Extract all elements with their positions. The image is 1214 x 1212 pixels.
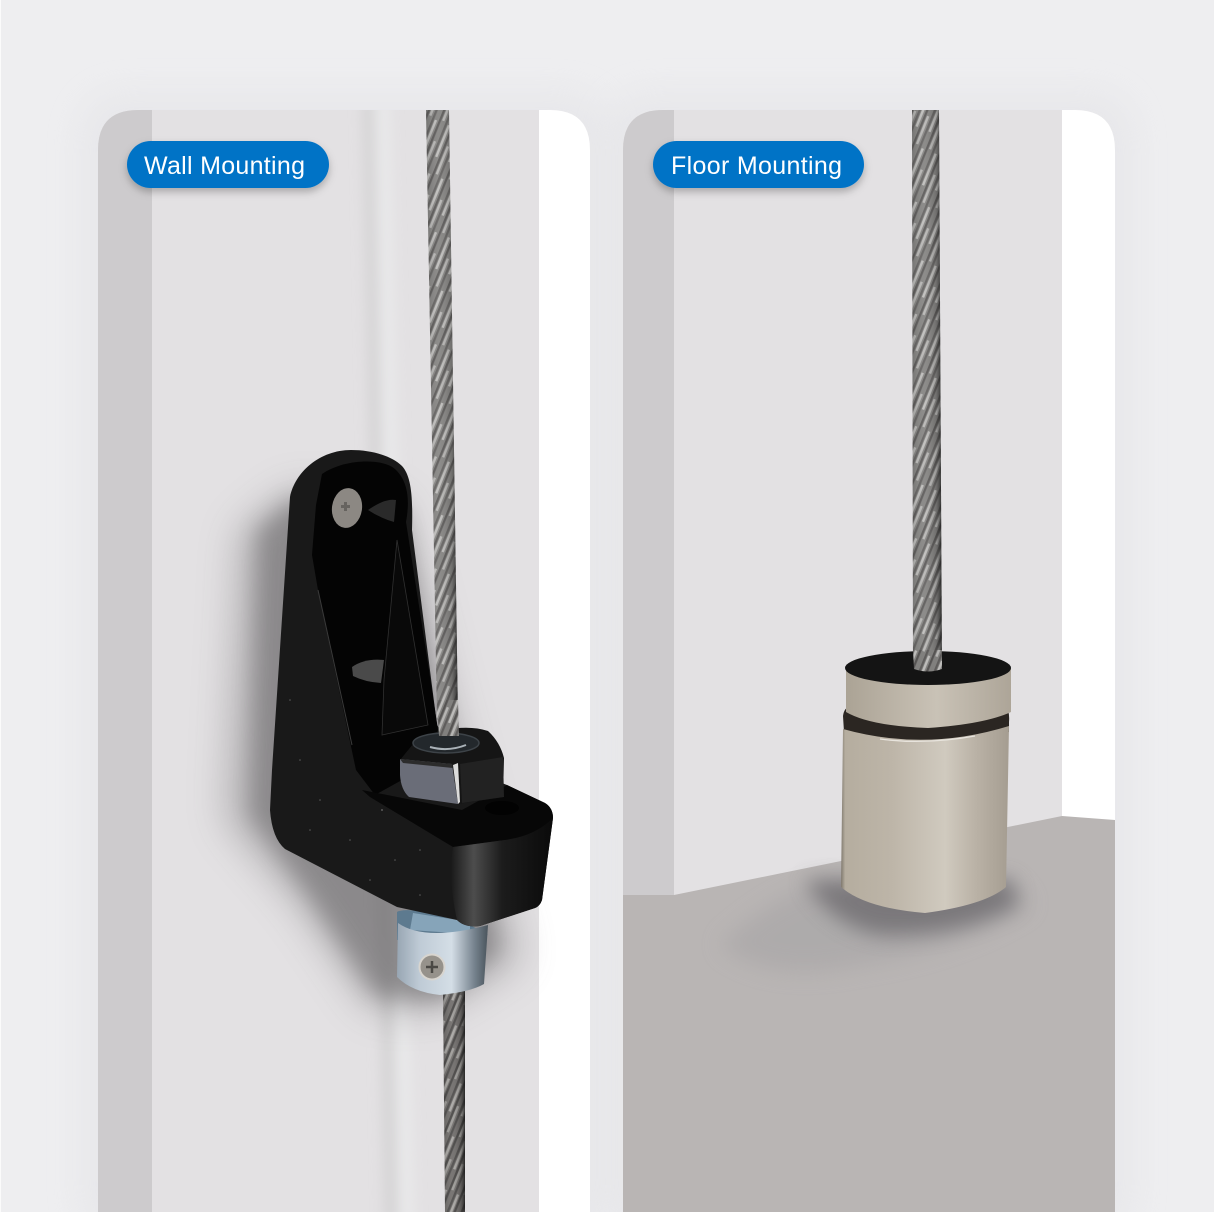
arm front face highlight [451, 818, 553, 926]
bracket gusset [382, 540, 428, 735]
cylinder floor shadow [720, 880, 1030, 972]
wall backdrop [674, 110, 1062, 111]
nut side face [460, 757, 504, 803]
washer [413, 733, 479, 753]
mounting screw [332, 488, 362, 528]
floor [623, 816, 1115, 1212]
hex nut [400, 728, 504, 804]
bracket inner recess [312, 461, 438, 795]
cylinder top ring [846, 668, 1011, 728]
panel: wall mounting [98, 100, 590, 1212]
steel cable [426, 110, 465, 1212]
bracket body [270, 450, 553, 926]
wall vertical soft band [364, 110, 394, 1212]
cylinder top face [845, 651, 1011, 685]
wall backdrop [152, 110, 539, 111]
left wall strip [98, 110, 152, 1212]
bracket [270, 450, 553, 926]
panel: floor mounting [623, 110, 1115, 1212]
steel cable [912, 110, 942, 675]
bracket boss highlight [352, 660, 384, 683]
arm foot top [362, 785, 553, 847]
right white strip [539, 110, 590, 1212]
cable through nut [437, 700, 459, 736]
bracket edge line [318, 590, 352, 745]
bracket close shadow [250, 500, 500, 1000]
label: floor mounting [653, 141, 864, 188]
label: wall mounting [127, 141, 329, 188]
bracket wide shadow [226, 490, 520, 1010]
left wall strip [623, 110, 674, 895]
label: floor mounting: Floor Mounting [671, 152, 842, 180]
cylinder weight [841, 650, 1011, 913]
right white strip [1062, 110, 1115, 820]
cylinder groove [843, 708, 1010, 740]
cable end [913, 650, 942, 672]
collar screw [420, 954, 444, 980]
label: wall mounting: Wall Mounting [144, 152, 305, 180]
locking collar [397, 910, 488, 995]
bracket hole [485, 801, 519, 815]
nut front face [400, 759, 458, 804]
cylinder body rim light [880, 736, 975, 741]
bracket speckles [289, 699, 421, 896]
nut body [401, 728, 504, 776]
cylinder body [841, 726, 1009, 913]
